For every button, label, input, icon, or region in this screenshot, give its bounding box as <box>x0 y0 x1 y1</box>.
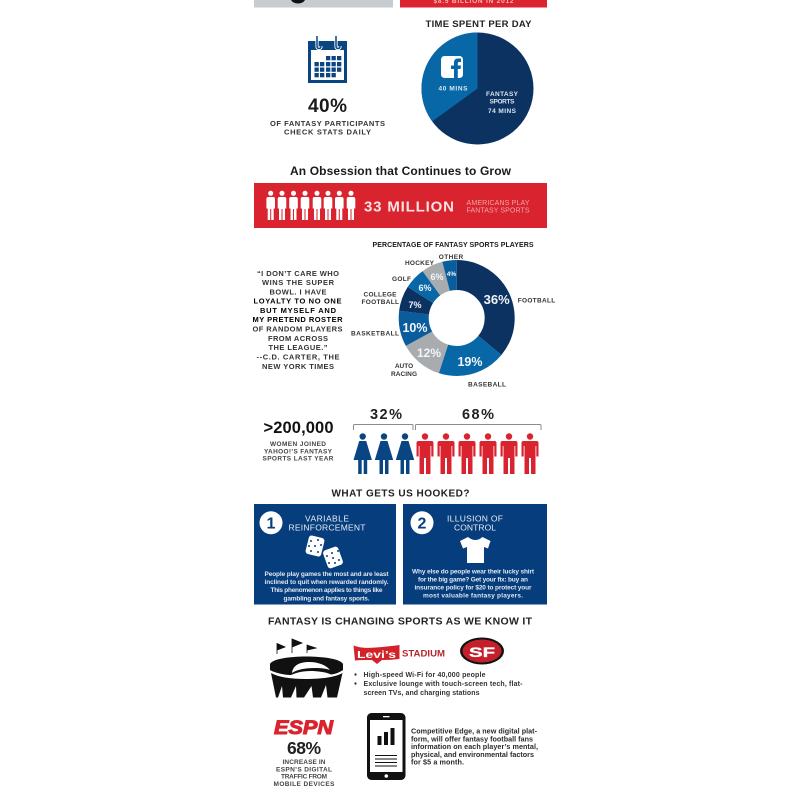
donut chart: sports share: 12% <box>417 346 441 360</box>
text: stadium bullets <box>354 672 523 697</box>
icon: stadium <box>270 639 343 698</box>
donut chart: sports share: BASEBALL <box>468 382 506 389</box>
icon: row of people <box>266 191 355 220</box>
pie chart: time spent <box>422 32 534 144</box>
panel: illusion of control: insurance policy for $20 to protect your <box>414 584 532 592</box>
heading: fantasy is changing sports: FANTASY IS CHANGING SPORTS AS WE KNOW IT <box>268 616 533 628</box>
text: competitive edge: Competitive Edge, a new digital plat- <box>411 726 538 736</box>
icon: t-shirt <box>460 537 490 563</box>
panel: illusion of control: ILLUSION OF <box>447 514 503 524</box>
heading: what gets us hooked: WHAT GETS US HOOKED? <box>332 489 470 500</box>
stat: 200,000 women joined: SPORTS LAST YEAR <box>262 456 334 462</box>
banner: 33 million: AMERICANS PLAY <box>466 200 530 207</box>
quote: C.D. Carter: WINS THE SUPER <box>262 278 335 287</box>
stat: 200,000 women joined: WOMEN JOINED <box>270 441 326 448</box>
stat: 200,000 women joined: >200,000 <box>264 419 334 437</box>
pie chart: time spent: 74 MINS <box>488 108 517 115</box>
stat: 40 percent check daily: 40% <box>308 96 347 117</box>
stat: 40 percent check daily: CHECK STATS DAILY <box>284 128 371 136</box>
pie chart: time spent: 40 MINS <box>438 86 468 92</box>
quote: C.D. Carter: THE LEAGUE.” <box>268 343 328 352</box>
panel: illusion of control: most valuable fantasy players. <box>423 592 523 600</box>
icon: facebook <box>441 56 463 78</box>
quote: C.D. Carter: LOYALTY TO NO ONE <box>254 296 342 306</box>
panel: variable reinforcement: VARIABLE <box>305 514 349 524</box>
stat: 68 percent increase: TRAFFIC FROM <box>281 774 327 780</box>
donut chart: sports share: 19% <box>457 355 483 369</box>
donut chart: sports share: AUTO <box>395 363 413 370</box>
stat: 68 percent increase <box>274 738 335 788</box>
text: competitive edge: for $5 a month. <box>411 758 464 766</box>
stat: 68 percent increase: INCREASE IN <box>282 759 326 766</box>
donut chart: sports share: FOOTBALL <box>518 298 555 305</box>
panel: illusion of control: Why else do people wear their lucky shirt <box>412 568 535 576</box>
stat: 68 percent increase: 68% <box>287 738 321 758</box>
donut chart: sports share: 6% <box>418 283 432 293</box>
stat: 68 percent increase: ESPN’S DIGITAL <box>276 766 332 773</box>
icon: calendar <box>308 36 347 83</box>
text: stadium bullets: Exclusive lounge with touch-screen tech, flat- <box>364 681 523 688</box>
quote: C.D. Carter: FROM ACROSS <box>268 334 328 343</box>
text: stadium bullets: High-speed Wi-Fi for 40,000 people <box>364 672 486 679</box>
donut chart: sports share: BASKETBALL <box>351 331 399 338</box>
gender split labels and brackets <box>354 407 541 430</box>
stat: 68 percent increase: MOBILE DEVICES <box>274 781 335 788</box>
text: competitive edge <box>411 726 538 766</box>
icon: tablet with chart <box>367 713 406 780</box>
banner: 33 million: FANTASY SPORTS <box>466 208 530 214</box>
panel: illusion of control: 2 <box>418 516 427 532</box>
panel: variable reinforcement: inclined to quit when rewarded randomly. <box>264 579 389 586</box>
quote: C.D. Carter <box>252 269 343 371</box>
icon: dice <box>305 535 344 569</box>
top gray panel remnant <box>254 0 393 8</box>
quote: C.D. Carter: --C.D. CARTER, THE <box>256 352 340 362</box>
logo: levi's stadium <box>354 645 445 664</box>
donut chart: sports share: 4% <box>447 271 456 278</box>
quote: C.D. Carter: NEW YORK TIMES <box>262 362 334 371</box>
icons: men 68 percent <box>416 433 538 474</box>
panel: variable reinforcement: REINFORCEMENT <box>288 522 366 532</box>
quote: C.D. Carter: OF RANDOM PLAYERS <box>252 324 342 334</box>
panel: variable reinforcement: This phenomenon applies to things like <box>270 587 383 594</box>
logo: levi's stadium: STADIUM <box>402 648 445 658</box>
panel: variable reinforcement <box>254 504 396 604</box>
quote: C.D. Carter: MY PRETEND ROSTER <box>252 315 343 324</box>
logo: 49ers oval: SF <box>469 644 496 660</box>
heading: percentage of fantasy sports players: PERCENTAGE OF FANTASY SPORTS PLAYERS <box>372 242 534 249</box>
heading: an obsession that continues to grow: An Obsession that Continues to Grow <box>290 164 512 178</box>
gender split labels and brackets: 68% <box>462 407 494 423</box>
donut chart: sports share: FOOTBALL <box>362 299 399 306</box>
donut chart: sports share: 7% <box>408 300 422 310</box>
donut chart: sports share <box>351 254 555 389</box>
pie chart: time spent: FANTASY <box>486 91 519 98</box>
banner: 33 million: 33 MILLION <box>364 198 454 216</box>
text: stadium bullets: screen TVs, and charging stations <box>364 690 480 697</box>
donut chart: sports share: OTHER <box>439 254 463 261</box>
stat: 40 percent check daily: OF FANTASY PARTICIPANTS <box>270 119 385 128</box>
banner: 33 million <box>254 183 547 228</box>
stat: 40 percent check daily <box>270 96 385 136</box>
logo: 49ers oval <box>460 638 504 664</box>
stat: 200,000 women joined <box>262 419 334 462</box>
donut chart: sports share: 6% <box>430 272 444 282</box>
top red panel remnant <box>400 0 547 8</box>
text: competitive edge: physical, and environmental factors <box>411 750 534 759</box>
panel: illusion of control: for the big game? Get your fix: buy an <box>418 576 528 584</box>
donut chart: sports share: GOLF <box>392 276 411 283</box>
donut chart: sports share: 10% <box>402 321 428 335</box>
quote: C.D. Carter: BUT MYSELF AND <box>260 306 337 315</box>
panel: variable reinforcement: 1 <box>267 516 276 532</box>
donut chart: sports share: COLLEGE <box>364 292 397 299</box>
text: competitive edge: form, will offer fantasy football fans <box>411 734 533 743</box>
donut chart: sports share: HOCKEY <box>405 260 435 267</box>
donut chart: sports share: RACING <box>391 371 417 378</box>
gender split labels and brackets: 32% <box>370 407 402 423</box>
logo: levi's stadium: Levi’s <box>357 650 397 661</box>
panel: variable reinforcement: People play games the most and are least <box>264 571 389 578</box>
quote: C.D. Carter: BOWL. I HAVE <box>270 287 326 296</box>
donut chart: sports share: 36% <box>484 292 510 307</box>
panel: illusion of control <box>403 504 547 604</box>
panel: illusion of control: CONTROL <box>454 522 496 532</box>
quote: C.D. Carter: “I DON’T CARE WHO <box>257 269 339 278</box>
panel: variable reinforcement: gambling and fantasy sports. <box>284 595 370 602</box>
heading: time spent per day: TIME SPENT PER DAY <box>426 19 532 30</box>
icons: women 32 percent <box>354 433 414 474</box>
pie chart: time spent: SPORTS <box>490 98 515 106</box>
logo: espn: ESPN <box>274 718 334 739</box>
text: competitive edge: information on each player’s mental, <box>411 742 538 751</box>
stat: 200,000 women joined: YAHOO!’S FANTASY <box>264 448 333 455</box>
